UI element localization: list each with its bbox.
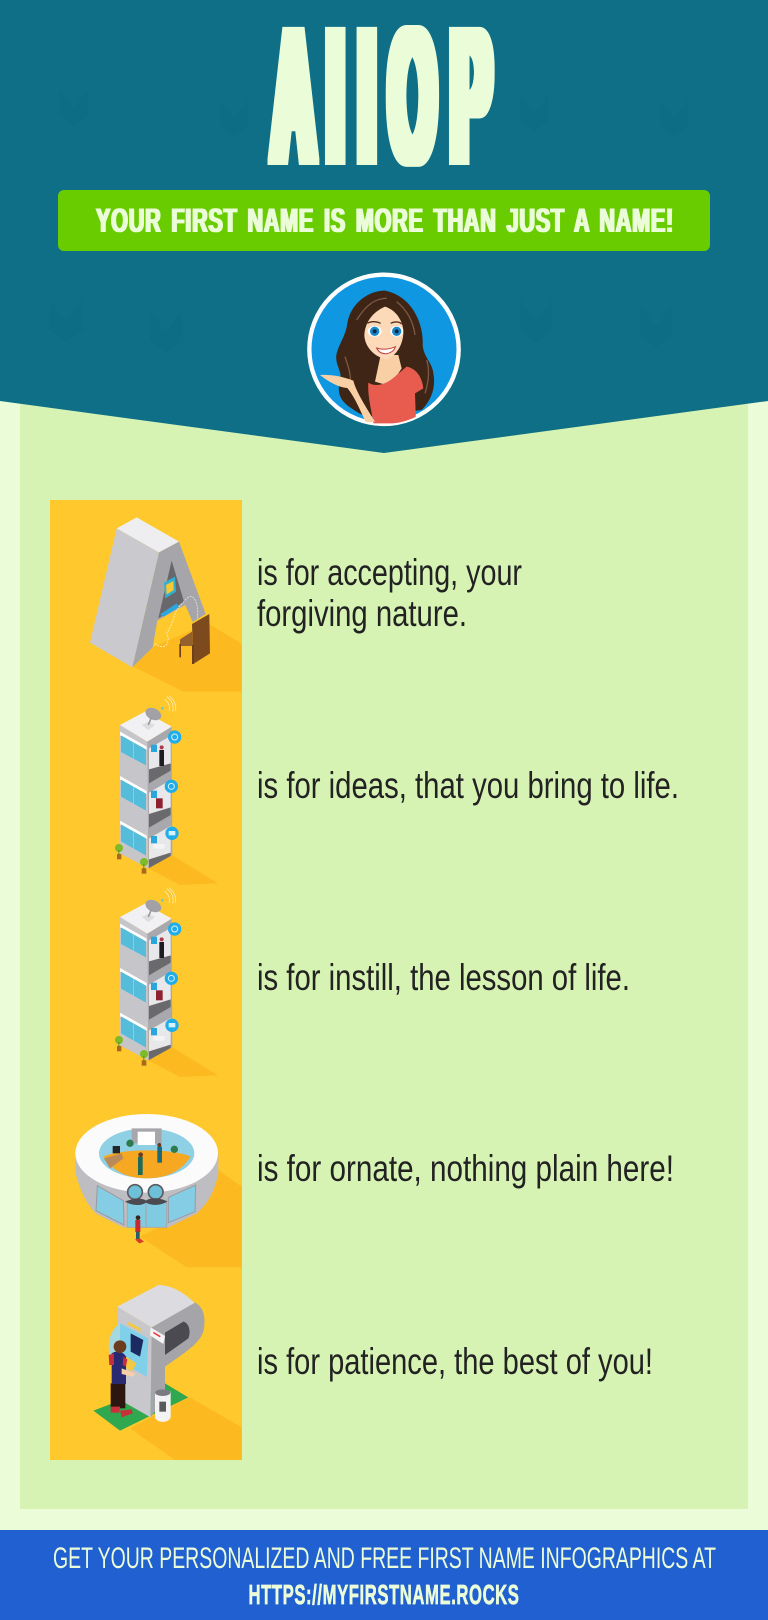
icon: letter P ATM [93,1285,242,1460]
yellow illustration column [50,500,242,1460]
text: ornate: is for ornate, nothing plain here! [257,1148,674,1189]
icon: office building [115,696,218,885]
content panel [20,395,748,1509]
row: A [90,517,522,692]
row: O [75,1114,674,1267]
text: A: forgiving nature. [257,593,467,634]
text: patience: is for patience, the best of you! [257,1341,653,1382]
row: P [93,1285,653,1460]
icon: office building [115,888,218,1077]
face [364,307,403,359]
subtitle banner [58,190,710,251]
arm and hand [320,375,375,423]
footer line 2: HTTPS://MYFIRSTNAME.ROCKS [248,1579,520,1610]
footer [0,1530,768,1620]
hair [336,291,434,417]
header background [0,0,768,453]
text: instill: is for instill, the lesson of life. [257,957,630,998]
text: A: is for accepting, your [257,552,522,593]
icon: letter A building [90,517,242,692]
neck [375,355,402,386]
shirt [368,367,423,423]
row: I (instill) [115,888,630,1077]
icon: ring-shaped optician building [75,1114,242,1267]
avatar: woman in circle [309,275,459,424]
text: A [257,552,522,634]
row: I (ideas) [115,696,679,885]
